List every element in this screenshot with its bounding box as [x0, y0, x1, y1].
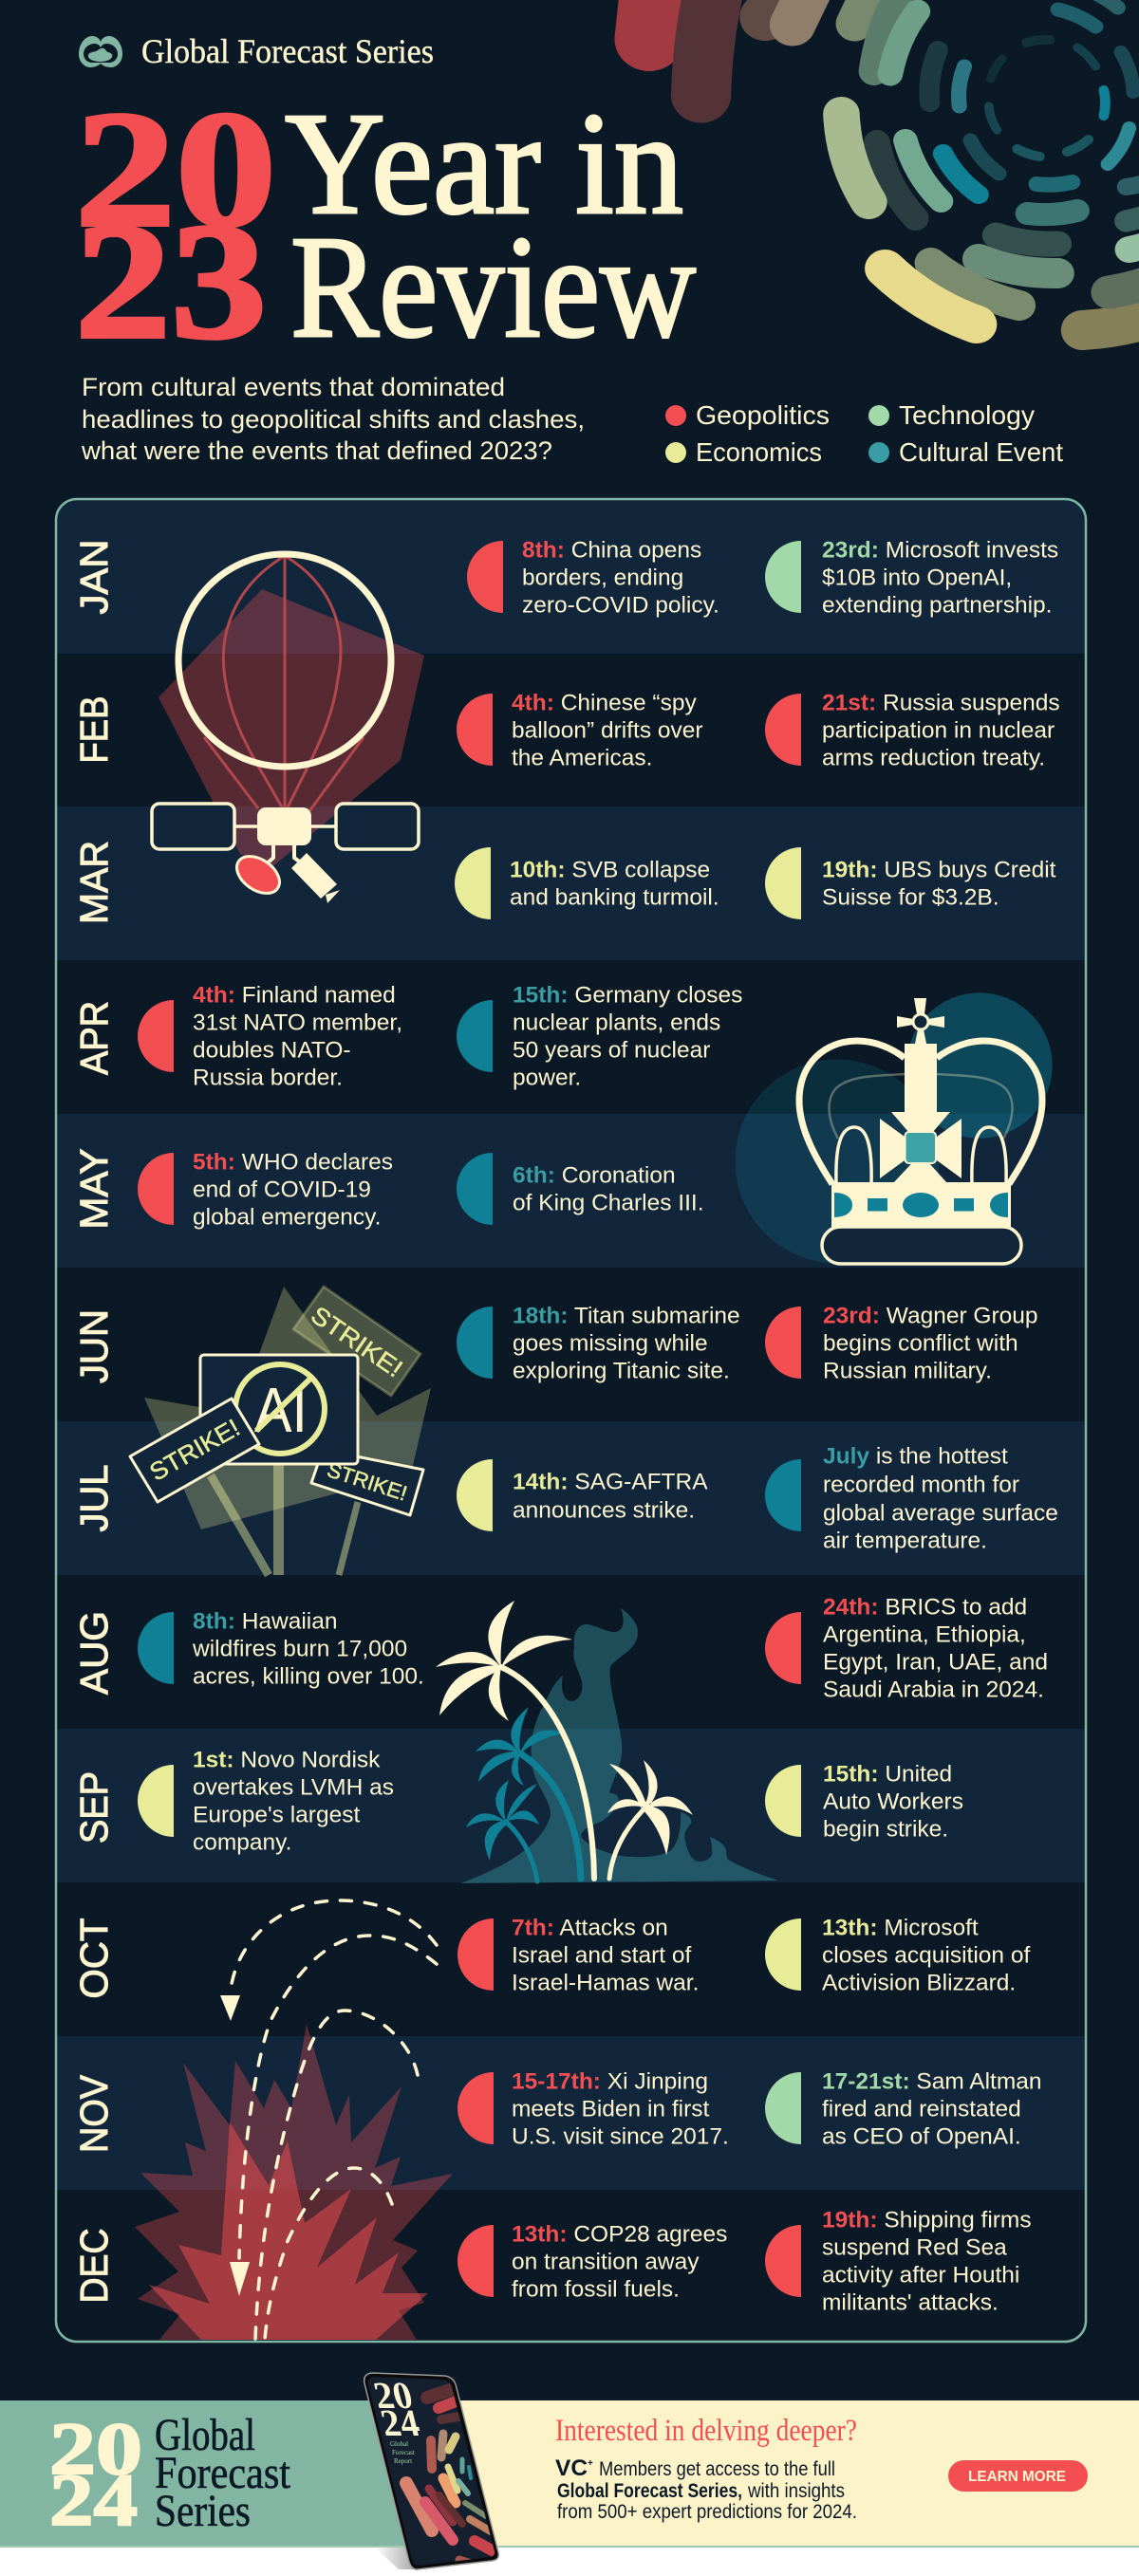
- row: September: 15th: United: [823, 1761, 952, 1788]
- row: March: and banking turmoil.: [510, 884, 719, 911]
- row: April: 31st NATO member,: [193, 1010, 402, 1036]
- logo: [79, 36, 122, 67]
- row: May: 5th: WHO declares: [193, 1150, 393, 1175]
- row: October: closes acquisition of: [822, 1943, 1030, 1968]
- row: September: [72, 1748, 963, 1856]
- row: January: extending partnership.: [822, 592, 1052, 619]
- row: November: NOV: [72, 2074, 116, 2153]
- row: January: $10B into OpenAI,: [822, 565, 1012, 590]
- footer: series name: Global: [155, 2410, 255, 2460]
- row: November: U.S. visit since 2017.: [512, 2123, 729, 2150]
- row: April: doubles NATO-: [193, 1038, 351, 1063]
- footer: series name: 20: [49, 2407, 142, 2490]
- row: September: begin strike.: [823, 1816, 948, 1843]
- row: April: Russia border.: [193, 1065, 343, 1091]
- footer: call to action text: +: [588, 2458, 593, 2469]
- row: November: meets Biden in first: [512, 2097, 710, 2122]
- row: January: [72, 537, 1058, 619]
- legend: [665, 400, 1063, 467]
- row: September: overtakes LVMH as: [193, 1774, 394, 1801]
- row: August: wildfires burn 17,000: [192, 1636, 407, 1662]
- footer: call to action text: VC: [555, 2456, 588, 2481]
- row: July: air temperature.: [823, 1528, 987, 1554]
- button: learn more: LEARN MORE: [968, 2469, 1066, 2485]
- title: [75, 77, 696, 373]
- row: July: announces strike.: [513, 1497, 695, 1524]
- row: December: 13th: COP28 agrees: [512, 2222, 727, 2247]
- footer: call to action heading: Interested in delving deeper?: [555, 2414, 857, 2448]
- row: February: FEB: [72, 696, 116, 763]
- row: August: Saudi Arabia in 2024.: [823, 1677, 1044, 1702]
- illustration: missiles and explosion: [135, 1900, 453, 2340]
- row: May: 6th: Coronation: [513, 1163, 676, 1188]
- row: April: [72, 983, 742, 1091]
- phone mockup: Forecast: [392, 2449, 415, 2456]
- decorative swirl of arcs: [649, 0, 1139, 330]
- row: July: [72, 1444, 1058, 1554]
- row: October: Activision Blizzard.: [822, 1970, 1016, 1996]
- footer: call to action text: Members get access to the full: [599, 2458, 835, 2480]
- footer: series name: Series: [155, 2486, 251, 2536]
- row: July: JUL: [72, 1465, 116, 1531]
- row: December: militants' attacks.: [822, 2290, 999, 2315]
- row: June: 18th: Titan submarine: [513, 1304, 740, 1328]
- row: December: from fossil fuels.: [512, 2277, 680, 2302]
- footer: series name: 24: [49, 2458, 138, 2541]
- panel: timeline background: [56, 499, 1086, 2342]
- illustration: AI strike signs: STRIKE!: [325, 1457, 410, 1506]
- row: October: Israel-Hamas war.: [512, 1970, 699, 1996]
- row: August: 8th: Hawaiian: [193, 1609, 338, 1634]
- row: October: [72, 1915, 1030, 1998]
- row: July: 14th: SAG-AFTRA: [513, 1469, 708, 1495]
- illustration: AI strike signs: STRIKE!: [306, 1300, 408, 1383]
- title: Review: [290, 207, 696, 368]
- illustration: wildfire and palm trees: [436, 1601, 778, 1883]
- phone mockup: Global: [390, 2440, 408, 2448]
- row: June: [72, 1304, 1038, 1383]
- footer: call to action text: [555, 2456, 857, 2523]
- row: January: JAN: [72, 539, 116, 615]
- phone mockup: Report: [394, 2457, 412, 2465]
- row: November: fired and reinstated: [822, 2097, 1021, 2122]
- row: January: 23rd: Microsoft invests: [822, 537, 1058, 564]
- intro text: what were the events that defined 2023?: [81, 436, 552, 465]
- phone mockup: 24: [376, 2402, 423, 2444]
- row: July: global average surface: [823, 1501, 1058, 1526]
- phone mockup: 20: [369, 2375, 417, 2417]
- row: December: [72, 2207, 1032, 2315]
- row: September: Europe's largest: [193, 1803, 360, 1827]
- row: April: nuclear plants, ends: [513, 1010, 720, 1036]
- row: August: acres, killing over 100.: [193, 1664, 424, 1689]
- row: May: [72, 1148, 704, 1230]
- row: December: 19th: Shipping firms: [822, 2207, 1032, 2233]
- row: December: DEC: [72, 2228, 116, 2304]
- row: September: SEP: [72, 1771, 116, 1844]
- title: 20: [75, 77, 276, 261]
- row: May: end of COVID-19: [193, 1177, 371, 1203]
- intro text: [81, 373, 585, 465]
- phone mockup: [364, 2373, 498, 2569]
- footer: series name: Forecast: [155, 2448, 291, 2498]
- row: February: arms reduction treaty.: [822, 746, 1045, 770]
- intro text: From cultural events that dominated: [82, 373, 505, 401]
- row: February: balloon” drifts over: [512, 717, 703, 744]
- row: April: 4th: Finland named: [193, 983, 396, 1008]
- row: February: participation in nuclear: [822, 717, 1055, 744]
- row: June: begins conflict with: [823, 1330, 1018, 1357]
- row: October: 13th: Microsoft: [822, 1915, 979, 1941]
- row: August: [72, 1594, 1048, 1702]
- row: September: company.: [193, 1829, 291, 1856]
- row: April: power.: [513, 1065, 581, 1091]
- row: April: APR: [72, 1001, 116, 1075]
- footer: series name: [49, 2407, 291, 2541]
- row: March: Suisse for $3.2B.: [822, 884, 999, 911]
- footer: call to action text: Global Forecast Series,: [557, 2480, 742, 2502]
- row: February: [72, 691, 1060, 770]
- row: January: 8th: China opens: [522, 537, 701, 564]
- row: March: MAR: [72, 841, 116, 924]
- brand name: Global Forecast Series: [141, 32, 434, 70]
- row: August: Argentina, Ethiopia,: [823, 1622, 1026, 1647]
- legend: Cultural Event: [899, 437, 1063, 467]
- row: November: [72, 2068, 1042, 2153]
- row: December: on transition away: [512, 2249, 700, 2275]
- illustration: AI strike signs: [130, 1287, 431, 1575]
- row: November: 17-21st: Sam Altman: [822, 2068, 1042, 2095]
- footer: call to action text: with insights: [747, 2480, 845, 2502]
- row: December: activity after Houthi: [822, 2262, 1019, 2289]
- row: June: exploring Titanic site.: [513, 1359, 730, 1383]
- row: January: zero-COVID policy.: [522, 592, 719, 619]
- illustration: AI strike signs: STRIKE!: [144, 1413, 245, 1487]
- row: October: Israel and start of: [512, 1943, 691, 1968]
- row: November: 15-17th: Xi Jinping: [512, 2068, 708, 2095]
- row: August: AUG: [72, 1611, 116, 1695]
- row: June: Russian military.: [823, 1359, 992, 1383]
- row: February: 4th: Chinese “spy: [512, 691, 697, 715]
- button: learn more: [948, 2460, 1088, 2492]
- legend: Geopolitics: [696, 400, 830, 430]
- illustration: spy balloon: [152, 554, 424, 903]
- row: April: 50 years of nuclear: [513, 1038, 710, 1063]
- row: October: OCT: [72, 1918, 116, 1998]
- row: June: 23rd: Wagner Group: [823, 1304, 1038, 1328]
- row: June: goes missing while: [513, 1330, 708, 1357]
- row: December: suspend Red Sea: [822, 2235, 1007, 2260]
- row: October: 7th: Attacks on: [512, 1915, 668, 1941]
- panel border: [56, 499, 1086, 2342]
- footer: call to action text: from 500+ expert predictions for 2024.: [557, 2501, 857, 2523]
- row: January: borders, ending: [522, 565, 683, 590]
- row: May: global emergency.: [193, 1205, 381, 1230]
- illustration: AI strike signs: AI: [254, 1375, 308, 1446]
- illustration: crown: [735, 992, 1053, 1264]
- row: September: 1st: Novo Nordisk: [193, 1748, 380, 1772]
- row: July: recorded month for: [823, 1473, 1019, 1497]
- title: 23: [75, 189, 267, 373]
- row: September: Auto Workers: [823, 1789, 963, 1814]
- footer band: [0, 2400, 1139, 2576]
- row: May: of King Charles III.: [513, 1190, 704, 1216]
- row: February: 21st: Russia suspends: [822, 691, 1060, 715]
- row: March: 19th: UBS buys Credit: [822, 858, 1055, 882]
- row: August: 24th: BRICS to add: [823, 1594, 1027, 1621]
- row: July: July is the hottest: [823, 1444, 1008, 1469]
- row: February: the Americas.: [512, 746, 652, 770]
- row: June: JUN: [72, 1309, 116, 1383]
- intro text: headlines to geopolitical shifts and clashes,: [82, 405, 585, 434]
- row: August: Egypt, Iran, UAE, and: [823, 1649, 1048, 1676]
- title: Year in: [285, 83, 683, 245]
- row: March: [72, 841, 1056, 924]
- row: November: as CEO of OpenAI.: [822, 2123, 1021, 2150]
- row: May: MAY: [72, 1148, 116, 1230]
- row: March: 10th: SVB collapse: [510, 858, 710, 882]
- row: April: 15th: Germany closes: [513, 983, 742, 1008]
- legend: Technology: [899, 400, 1035, 430]
- legend: Economics: [696, 437, 822, 467]
